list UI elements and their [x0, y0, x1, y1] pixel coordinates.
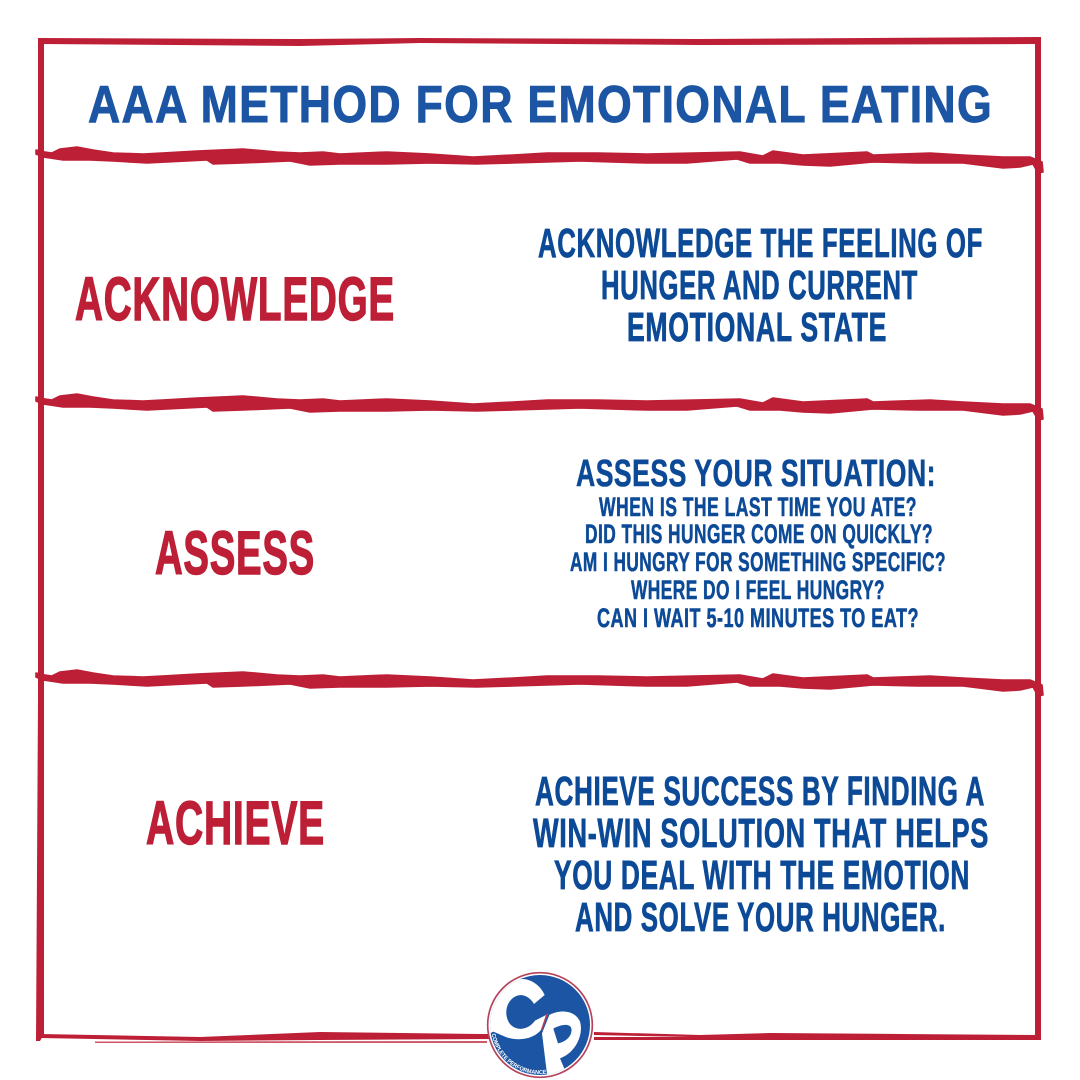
description: assess: WHERE DO I FEEL HUNGRY? — [631, 575, 885, 605]
description: assess: CAN I WAIT 5-10 MINUTES TO EAT? — [597, 603, 919, 633]
label: achieve: ACHIEVE — [146, 789, 325, 857]
description: assess: ASSESS YOUR SITUATION: — [576, 453, 936, 495]
description: acknowledge — [538, 220, 983, 350]
hand-drawn divider 1 — [36, 147, 1043, 173]
label: assess: ASSESS — [155, 519, 315, 587]
description: achieve — [533, 768, 989, 940]
logo: Complete Performance — [486, 972, 594, 1078]
logo: Complete Performance: COMPLETE PERFORMANCE — [492, 1034, 546, 1074]
hand-drawn divider 3 — [36, 670, 1043, 696]
hand-drawn divider 2 — [36, 394, 1043, 420]
label: acknowledge: ACKNOWLEDGE — [75, 265, 395, 333]
description: assess: WHEN IS THE LAST TIME YOU ATE? — [599, 492, 917, 522]
description: acknowledge: EMOTIONAL STATE — [627, 304, 887, 350]
description: assess — [570, 453, 946, 633]
